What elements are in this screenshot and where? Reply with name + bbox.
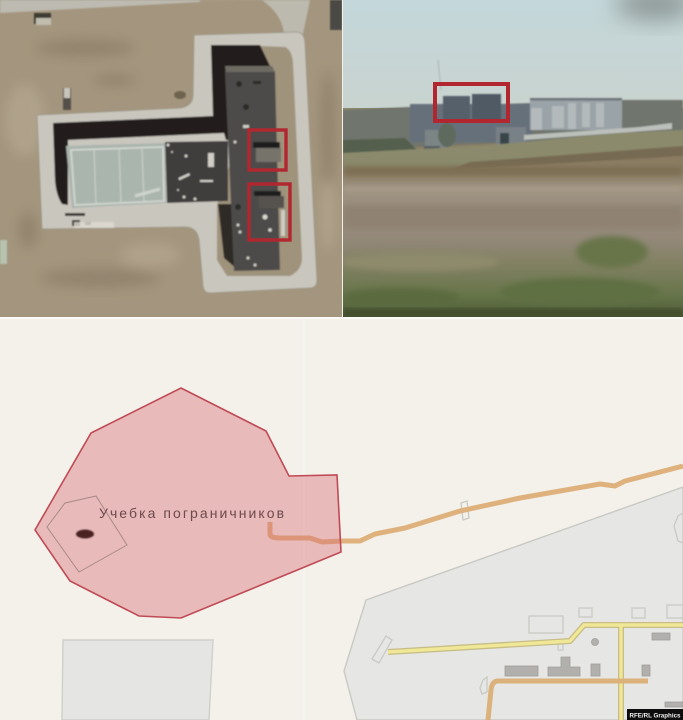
trees [343, 138, 420, 153]
small vehicles along south edge [65, 213, 91, 226]
marker: upper roof unit [249, 130, 286, 170]
light roof hall [66, 143, 166, 208]
inner ground patch right [217, 46, 302, 276]
map: right grey territory [344, 487, 683, 720]
icon: dark object marker [76, 530, 94, 538]
map: lower-left grey area [62, 640, 213, 720]
rooftop units in red frames [253, 142, 280, 148]
credit label [627, 709, 683, 720]
marker: lower roof unit [249, 184, 290, 240]
grass lower layers [340, 166, 683, 308]
building [410, 104, 532, 142]
building shadow [53, 45, 276, 205]
smoke [615, 0, 683, 20]
road at top [262, 0, 310, 34]
field band [343, 130, 683, 166]
main wing roof [225, 71, 280, 271]
concrete apron [37, 32, 317, 293]
map: outlined footprints [372, 501, 683, 694]
marker: building section [435, 84, 508, 121]
map: red restricted zone [35, 388, 341, 618]
dark connecting block [165, 141, 228, 203]
panel: ground photograph of the site [340, 0, 683, 317]
roof fixtures [166, 125, 256, 266]
map: yellow roads [388, 625, 683, 720]
distant hills [343, 100, 683, 150]
panel: satellite view of the site [0, 0, 342, 317]
panel: map [0, 317, 683, 720]
map: grey buildings [505, 633, 683, 707]
map: orange road to the site [270, 466, 683, 542]
map label: Учебка пограничников [99, 505, 284, 521]
small structures [34, 13, 51, 24]
truck on apron edge [63, 88, 71, 110]
credit label: RFE/RL Graphics [630, 712, 681, 720]
map: inner training ground outline [47, 496, 127, 572]
map: orange road lower [488, 681, 648, 720]
